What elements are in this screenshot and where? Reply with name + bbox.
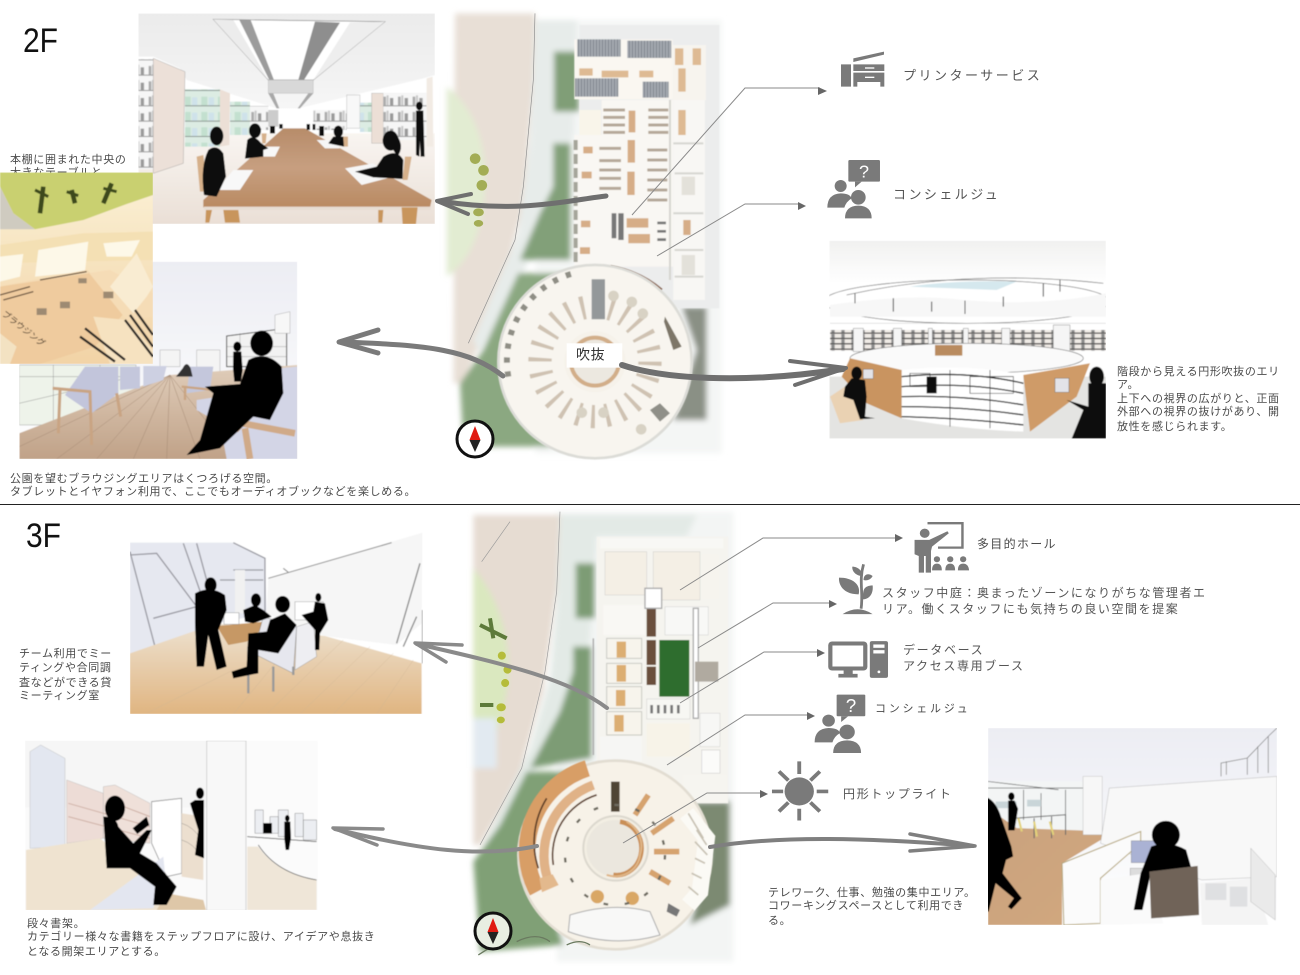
arrow: to stepped stacks — [333, 828, 537, 852]
icon: sun — [772, 761, 828, 820]
caption: meeting room: ティングや合同調 — [19, 660, 112, 674]
heading: 2F: 2F — [23, 22, 58, 60]
caption: coworking area: コワーキングスペースとして利用でき — [768, 898, 964, 912]
caption: stepped stacks — [27, 916, 375, 958]
circular reading room — [498, 265, 692, 458]
icon: printer — [841, 52, 884, 87]
caption: central table — [10, 152, 126, 179]
arrow: to meeting room — [415, 643, 607, 708]
caption: atrium: ア。 — [1117, 379, 1139, 391]
arrow: to browsing area — [339, 330, 503, 376]
label box: atrium: 吹抜 — [576, 346, 605, 362]
caption: stepped stacks: となる開架エリアとする。 — [27, 945, 166, 958]
caption: stepped stacks: 段々書架。 — [27, 916, 85, 930]
icon: compass 2F — [457, 421, 493, 457]
photo: browsing area — [19, 262, 297, 459]
icon: concierge: ? — [859, 161, 869, 181]
site surroundings — [447, 13, 722, 453]
heading: 3F: 3F — [26, 517, 61, 555]
icon: concierge 3F — [815, 695, 865, 753]
label: multipurpose hall: 多目的ホール — [977, 536, 1057, 551]
photo: coworking area — [984, 728, 1277, 925]
leader line: multipurpose hall — [680, 534, 903, 590]
panel: 2F floor — [0, 13, 1280, 498]
panel: 3F floor — [19, 512, 1277, 962]
caption: atrium: 階段から見える円形吹抜のエリ — [1117, 364, 1280, 378]
photo: central table library — [138, 13, 435, 224]
caption: stepped stacks: カテゴリー様々な書籍をステップフロアに設け、アイデアや息抜き — [27, 929, 375, 943]
caption: atrium: 上下への視界の広がりと、正面 — [1117, 391, 1280, 405]
site surroundings — [473, 512, 733, 962]
caption: meeting room: 査などができる貸 — [19, 675, 112, 689]
text: staff courtyard — [882, 585, 1207, 616]
photo: stepped stacks — [25, 741, 318, 911]
label: printer service: プリンターサービス — [903, 68, 1042, 83]
caption: central table: 大きなテーブルと — [10, 165, 103, 179]
caption: meeting room: チーム利用でミー — [19, 647, 112, 660]
text: database booth: アクセス専用ブース — [903, 658, 1025, 673]
label box: atrium — [567, 343, 622, 368]
arrow: to atrium — [622, 361, 846, 385]
building wing — [574, 25, 719, 308]
arrow: to central table — [437, 194, 606, 214]
caption: meeting room — [19, 647, 112, 702]
text: database booth — [903, 642, 1025, 673]
site model plan 3F — [473, 512, 733, 962]
caption: coworking area: る。 — [768, 915, 791, 927]
icon: computer — [830, 641, 888, 678]
silhouettes — [195, 577, 328, 678]
leader line: printer — [632, 87, 827, 215]
icon: concierge 3F: ? — [846, 695, 856, 716]
leader line: concierge — [667, 712, 815, 765]
leader line: concierge — [657, 202, 806, 256]
icon: compass 3F — [475, 913, 511, 949]
leader line: top light — [623, 790, 768, 843]
icon: plant — [839, 564, 873, 614]
caption: browsing area — [10, 471, 416, 498]
label: concierge 3F: コンシェルジュ — [875, 703, 970, 715]
text: staff courtyard: リア。働くスタッフにも気持ちの良い空間を提案 — [882, 601, 1179, 616]
caption: atrium — [1117, 364, 1280, 433]
silhouettes — [843, 367, 1106, 439]
caption: coworking area: テレワーク、仕事、勉強の集中エリア。 — [768, 885, 976, 899]
icon: concierge — [827, 160, 880, 218]
text: staff courtyard: スタッフ中庭：奥まったゾーンになりがちな管理者エ — [882, 585, 1207, 600]
silhouettes — [187, 331, 283, 455]
site model plan 2F — [447, 13, 722, 458]
photo: model close-up overlay — [0, 172, 153, 364]
caption: atrium: 放性を感じられます。 — [1117, 419, 1232, 433]
caption: meeting room: ミーティング室 — [19, 688, 100, 702]
arrow: to coworking — [710, 834, 975, 851]
circular hall — [518, 761, 712, 949]
divider line — [0, 504, 1300, 505]
silhouettes — [203, 102, 425, 197]
text: database booth: データベース — [903, 642, 984, 657]
caption: browsing area: タブレットとイヤフォン利用で、ここでもオーディオブックなどを楽しめる。 — [10, 484, 416, 498]
photo: circular atrium — [823, 241, 1110, 439]
icon: teacher with audience — [915, 523, 969, 573]
caption: atrium: 外部への視界の抜けがあり、開 — [1117, 404, 1280, 418]
caption: coworking area — [768, 885, 976, 927]
label: top light: 円形トップライト — [843, 787, 953, 801]
leader line: staff courtyard — [698, 600, 837, 648]
silhouettes — [103, 788, 291, 905]
caption: central table: 本棚に囲まれた中央の — [10, 152, 126, 166]
label: concierge: コンシェルジュ — [893, 187, 1000, 202]
building wing — [593, 537, 728, 803]
caption: browsing area: 公園を望むブラウジングエリアはくつろげる空間。 — [10, 471, 278, 485]
photo: model close-up overlay: ブラウジング — [0, 308, 48, 349]
leader line: database booth — [680, 649, 825, 703]
silhouettes — [984, 792, 1191, 912]
photo: meeting room — [130, 515, 423, 714]
